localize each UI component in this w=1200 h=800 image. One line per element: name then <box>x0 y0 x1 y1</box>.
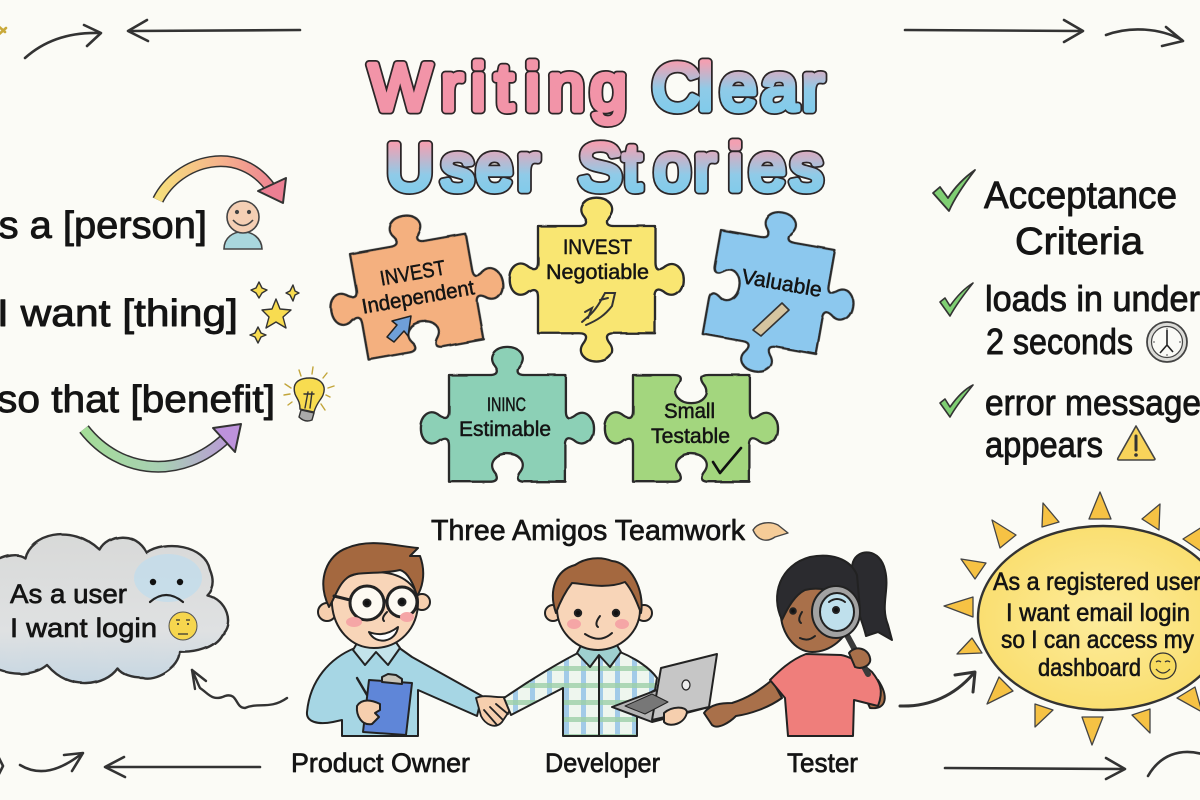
icon: sparkles <box>250 282 299 343</box>
panel: good story sun <box>944 492 1200 745</box>
puzzle piece: Negotiable: INVEST <box>563 236 632 259</box>
title line 1: Writing <box>369 50 627 124</box>
title line 1: Clear <box>652 50 824 124</box>
text: registered user story <box>993 568 1200 682</box>
icon: person <box>224 201 262 249</box>
hair <box>553 558 642 613</box>
puzzle piece: Small Testable <box>605 375 778 482</box>
heading: acceptance criteria: Criteria <box>1015 221 1144 263</box>
ears <box>318 603 336 621</box>
face <box>781 578 850 652</box>
icon: neutral emoji <box>169 612 197 640</box>
title line 1: Writing <box>369 50 627 124</box>
text: error message appears <box>985 382 1200 465</box>
puzzle piece: Independent: Independent <box>360 276 476 319</box>
heading: acceptance criteria <box>984 175 1177 263</box>
puzzle piece: Independent: INVEST <box>378 256 447 291</box>
text: loads in under 2 seconds: 2 seconds <box>986 321 1133 362</box>
panel: bad story cloud <box>0 534 229 683</box>
sun rays <box>944 492 1200 745</box>
puzzle piece: Negotiable <box>510 198 683 362</box>
decorative arrows: top right <box>905 20 1183 46</box>
labels: roles: Developer <box>545 748 660 778</box>
shirt <box>770 654 881 736</box>
pen <box>357 678 367 695</box>
sun body <box>978 526 1200 710</box>
ears <box>545 605 561 621</box>
handshake <box>476 696 510 726</box>
labels: roles <box>291 748 858 778</box>
panel: three amigos figures <box>291 543 892 778</box>
title line 2: User <box>386 130 539 204</box>
decorative arrows: top left <box>0 20 300 58</box>
title line 2: Stories <box>578 130 823 204</box>
arrow: squiggle to cloud <box>192 670 287 708</box>
cloud shape <box>0 534 229 683</box>
text: I want thing: I want [thing] <box>0 293 238 335</box>
title <box>369 50 824 204</box>
puzzle piece: Independent <box>317 201 512 365</box>
puzzle piece: Small Testable: Testable <box>651 425 730 448</box>
decorative arrows: bottom left <box>0 753 260 777</box>
text: loads in under 2 seconds <box>985 278 1200 362</box>
arrow: to sun <box>900 672 975 706</box>
arrow: rainbow bottom <box>84 424 241 467</box>
tester left arm and hand <box>704 680 782 727</box>
title line 2: User <box>386 130 539 204</box>
heading: three amigos teamwork: Three Amigos Teamwork <box>431 515 745 547</box>
panel: story template <box>0 161 334 467</box>
icon: check 3 <box>940 385 973 417</box>
decorative arrows: bottom right <box>945 752 1200 779</box>
ponytail <box>851 552 892 640</box>
figure: developer <box>504 558 717 736</box>
text: error message appears: appears <box>985 424 1103 465</box>
face <box>332 572 418 648</box>
panel: acceptance criteria <box>933 170 1200 465</box>
magnifying glass <box>812 586 868 674</box>
title line 1: Clear <box>652 50 824 124</box>
shirt <box>307 647 482 736</box>
icon: check large <box>933 170 975 211</box>
glasses <box>334 586 417 620</box>
text: so that benefit: so that [benefit] <box>0 379 275 421</box>
clipboard <box>363 674 412 735</box>
puzzle piece: Estimable: ININC <box>487 395 526 416</box>
hair <box>323 543 423 607</box>
heading: acceptance criteria: Acceptance <box>984 175 1177 217</box>
icon: pointing hand <box>753 523 788 540</box>
title line 2: Stories <box>578 130 823 204</box>
text: as a user I want login: I want login <box>10 613 157 643</box>
puzzle piece: Valuable: Valuable <box>740 265 824 302</box>
panel: INVEST puzzle pieces <box>317 198 867 482</box>
puzzle piece: Negotiable: Negotiable <box>546 261 649 284</box>
icon: check 2 <box>940 283 973 316</box>
shirt <box>504 652 657 736</box>
puzzle piece: Estimable: Estimable <box>459 418 551 441</box>
puzzle piece: Valuable <box>698 203 867 386</box>
text: as a user I want login <box>10 579 157 643</box>
labels: roles: Product Owner <box>291 748 470 778</box>
labels: roles: Tester <box>787 748 858 778</box>
icon: light bulb <box>284 367 334 421</box>
hair <box>777 556 860 620</box>
icon: clock <box>1147 322 1187 362</box>
laptop <box>612 654 717 722</box>
puzzle piece: Small Testable: Small <box>664 400 715 423</box>
puzzle piece: Estimable <box>421 347 594 482</box>
figure: tester <box>704 552 892 736</box>
figure: product owner <box>307 543 482 736</box>
text: as a user I want login: As a user <box>10 579 127 609</box>
icon: smile emoji <box>1150 653 1176 679</box>
icon: warning triangle <box>1118 426 1155 460</box>
face <box>557 572 640 650</box>
sad face <box>134 554 202 602</box>
title line 1 <box>369 50 824 124</box>
text: registered user story: dashboard <box>1038 654 1141 682</box>
arm right <box>862 680 885 708</box>
arrow: rainbow top <box>158 161 286 203</box>
text: registered user story: I want email login <box>1006 599 1190 627</box>
title line 2 <box>386 130 823 204</box>
